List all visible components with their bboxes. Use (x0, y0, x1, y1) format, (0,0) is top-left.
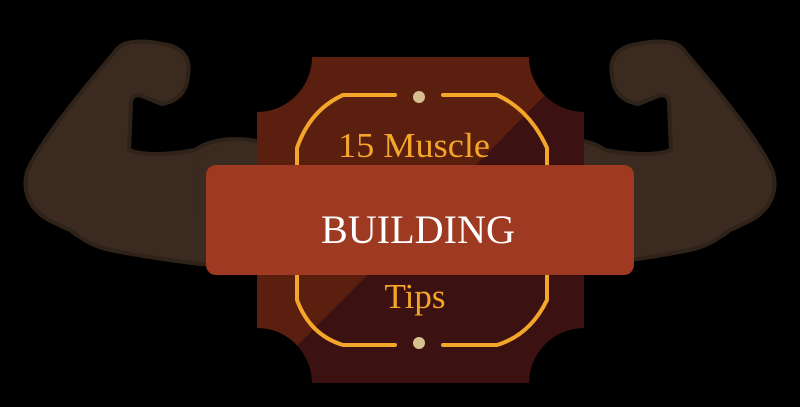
icon: top dot (413, 91, 425, 103)
icon: bottom dot (413, 337, 425, 349)
heading: 15 Muscle: 15 Muscle (338, 126, 490, 165)
icon: left flexed arm (25, 41, 287, 266)
panel: plaque (257, 57, 584, 383)
gold frame (297, 95, 547, 345)
banner (206, 165, 634, 275)
heading: BUILDING: BUILDING (321, 207, 515, 252)
heading: Tips: Tips (384, 277, 446, 316)
icon: right flexed arm (513, 41, 775, 266)
